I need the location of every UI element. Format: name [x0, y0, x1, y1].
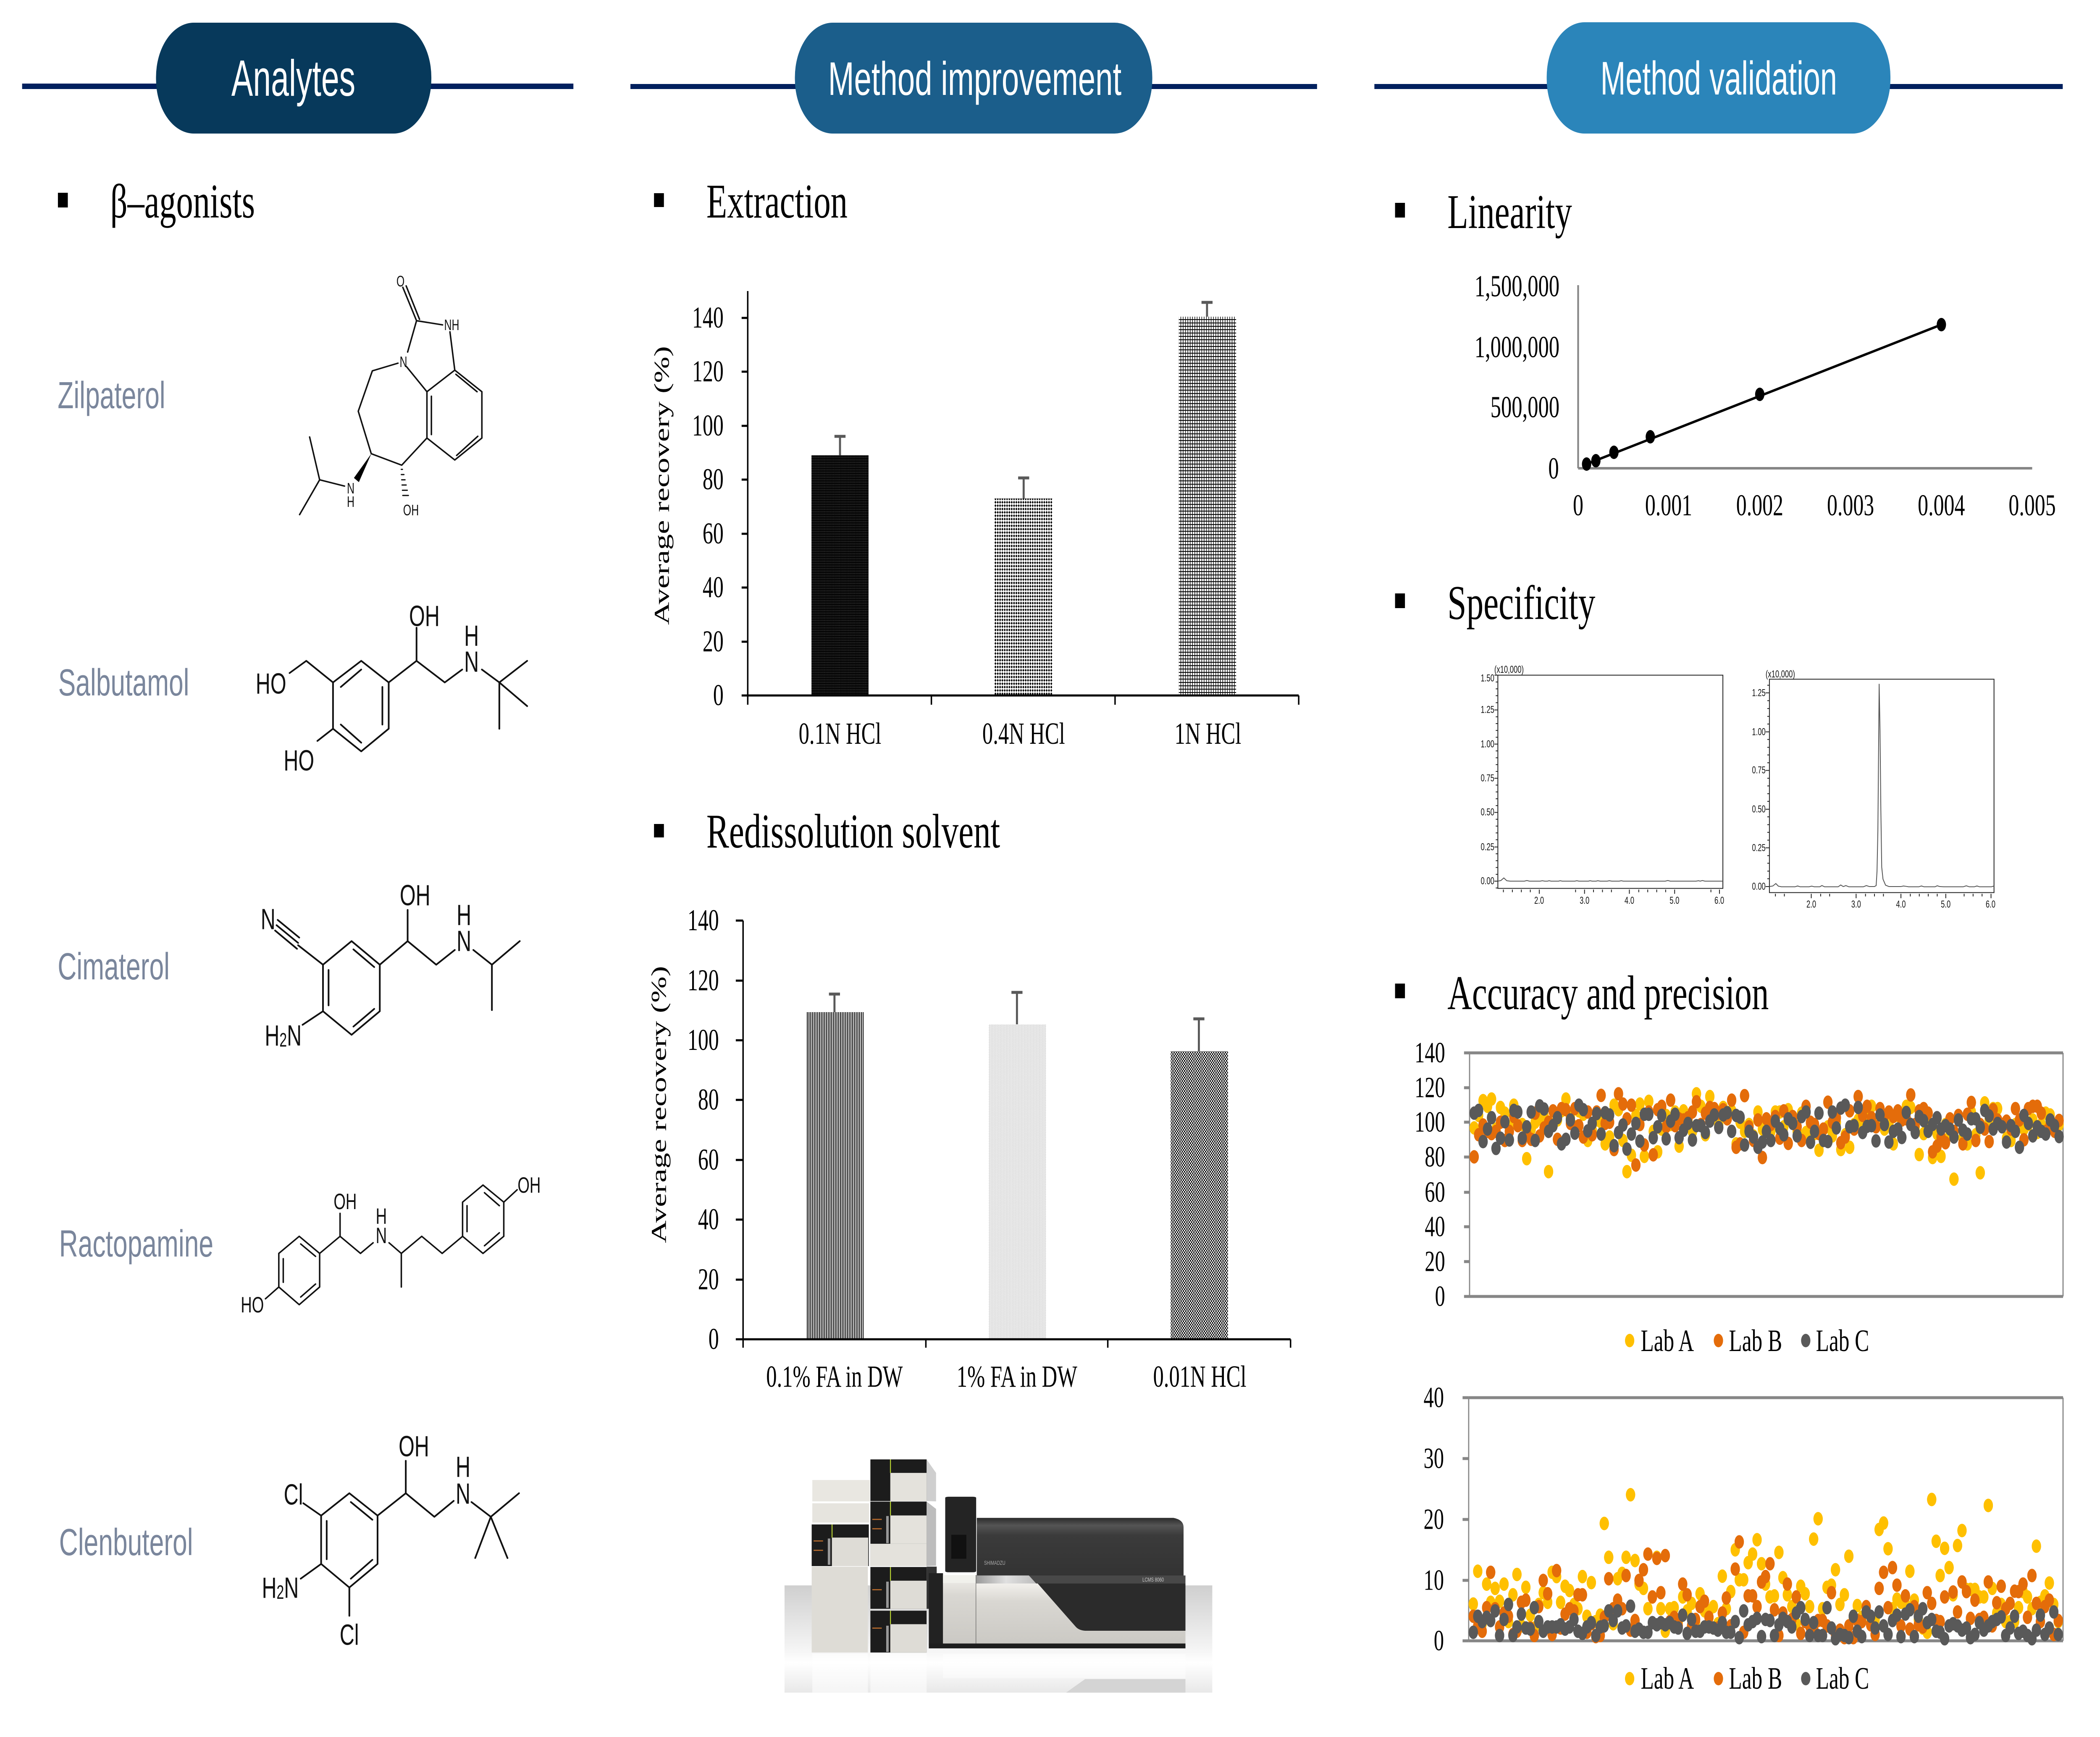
label: Salbutamol: Salbutamol	[58, 662, 189, 704]
panel: method improvement header: Method improvement	[828, 53, 1121, 105]
heading: Linearity	[1395, 185, 1572, 239]
structure: Cimaterol	[261, 878, 520, 1052]
structure: Cimaterol: 2	[279, 1029, 287, 1051]
axis numbers: 0.75	[1752, 765, 1766, 776]
structure: Zilpaterol: NH	[444, 317, 459, 333]
axis numbers: 3.0	[1851, 899, 1861, 910]
heading: Redissolution solvent: Redissolution solvent	[706, 804, 1000, 858]
axis numbers: 5.0	[1941, 899, 1950, 910]
series: Lab C	[1473, 1604, 2058, 1639]
axis numbers: 0.75	[1481, 773, 1494, 784]
y axis numbers: 60	[1425, 1176, 1445, 1209]
heading: Linearity: Linearity	[1447, 185, 1572, 239]
error bars	[829, 992, 1205, 1051]
y axis numbers: 0	[713, 679, 724, 712]
structure: Zilpaterol: N	[347, 480, 354, 497]
y axis numbers: 20	[698, 1263, 719, 1296]
structure: Clenbuterol: OH	[399, 1429, 429, 1463]
structure: Cimaterol: N	[287, 1018, 302, 1052]
y axis numbers: 30	[1423, 1442, 1444, 1475]
axis numbers: (x10,000)	[1766, 669, 1795, 680]
y axis numbers	[1423, 1381, 1444, 1657]
axis numbers: 3.0	[1580, 895, 1589, 906]
structure: Clenbuterol: Cl	[340, 1618, 359, 1651]
legend: Lab C	[1816, 1661, 1869, 1695]
calibration line	[1587, 325, 1941, 464]
structure: Salbutamol: N	[464, 645, 479, 678]
structure: Cimaterol: H	[457, 898, 471, 931]
label: Zilpaterol: Zilpaterol	[58, 375, 165, 417]
axis numbers: 0.50	[1481, 807, 1494, 818]
axis numbers: 1.00	[1481, 739, 1494, 750]
y axis numbers: 20	[1425, 1245, 1445, 1278]
y axis numbers	[688, 904, 719, 1356]
error bars	[835, 302, 1213, 499]
bar: 0.4N HCl	[995, 499, 1052, 695]
structure: Ractopamine: OH	[333, 1189, 357, 1214]
x axis categories: 1% FA in DW	[957, 1359, 1077, 1393]
y axis numbers: 1,000,000	[1475, 330, 1559, 364]
axes	[736, 921, 1291, 1348]
y axis numbers: 0	[709, 1322, 719, 1356]
structure: Ractopamine: H	[376, 1204, 387, 1229]
panel: analytes header	[22, 23, 573, 134]
structure: Cimaterol: N	[457, 924, 471, 958]
x axis categories: 0.01N HCl	[1153, 1359, 1247, 1393]
x axis categories: 0.4N HCl	[982, 716, 1065, 750]
y axis title: Average recovery (%)	[650, 346, 674, 625]
series: Lab B	[1474, 1094, 2059, 1165]
y axis numbers: 140	[692, 301, 724, 335]
instrument model text: LCMS 8060	[1142, 1576, 1164, 1583]
bar chart: redissolution solvent recovery	[647, 904, 1291, 1393]
axis numbers: 0.25	[1481, 842, 1494, 853]
y axis numbers: 80	[698, 1083, 719, 1117]
axes	[1578, 285, 2032, 468]
y axis numbers	[692, 301, 724, 712]
heading: beta-agonists: β–agonists	[110, 174, 255, 228]
heading: Extraction: Extraction	[706, 174, 848, 228]
x axis categories	[799, 716, 1241, 750]
structure: Clenbuterol: 2	[276, 1582, 284, 1603]
structure: Salbutamol: OH	[409, 599, 440, 632]
axis numbers: 0.25	[1752, 842, 1766, 853]
x axis numbers: 0	[1573, 489, 1583, 522]
axis numbers	[1481, 664, 1724, 906]
y axis numbers: 60	[698, 1143, 719, 1177]
axes	[742, 291, 1299, 705]
y axis title: Average recovery (%)	[647, 966, 671, 1243]
x axis categories: 0.1N HCl	[799, 716, 881, 750]
structure: Clenbuterol: H	[456, 1450, 470, 1483]
scatter chart: accuracy	[1415, 1036, 2063, 1358]
structure: Ractopamine: HO	[241, 1292, 264, 1317]
axis numbers: 1.00	[1752, 727, 1766, 737]
y axis numbers: 20	[703, 625, 724, 659]
y axis numbers: 140	[1415, 1036, 1445, 1069]
y axis numbers: 80	[703, 463, 724, 496]
x axis numbers: 0.004	[1918, 489, 1965, 522]
y axis numbers: 100	[688, 1023, 719, 1057]
axis numbers: 0.00	[1481, 876, 1494, 887]
legend	[1625, 1661, 1869, 1695]
x axis categories: 0.1% FA in DW	[766, 1359, 903, 1393]
axis numbers: 1.25	[1752, 687, 1766, 698]
illustration: LC-MS/MS instrument	[785, 1459, 1212, 1692]
axis numbers: 4.0	[1625, 895, 1634, 906]
structure: Cimaterol: N	[261, 902, 276, 936]
x axis numbers	[1573, 489, 2056, 522]
bar: 1N HCl	[1179, 317, 1236, 695]
y axis numbers: 0	[1435, 1280, 1445, 1313]
x axis categories	[766, 1359, 1247, 1393]
axis numbers: 0.00	[1752, 881, 1766, 892]
bar chart: extraction recovery	[650, 291, 1299, 750]
panel: method improvement header	[630, 23, 1317, 134]
y axis numbers: 1,500,000	[1475, 269, 1559, 303]
label: Clenbuterol: Clenbuterol	[59, 1522, 193, 1564]
legend: Lab B	[1729, 1323, 1782, 1358]
legend: Lab C	[1816, 1323, 1869, 1358]
structure: Cimaterol: OH	[400, 878, 430, 912]
y axis numbers	[1475, 269, 1559, 485]
axis numbers: 0.50	[1752, 804, 1766, 815]
chromatogram: sample peak	[1752, 669, 1995, 910]
chromatogram: blank	[1481, 664, 1724, 906]
structure: Salbutamol: HO	[284, 743, 314, 777]
axis numbers: 2.0	[1534, 895, 1544, 906]
structure: Clenbuterol: N	[284, 1571, 299, 1604]
y axis numbers: 40	[698, 1203, 719, 1236]
axis numbers: 5.0	[1670, 895, 1679, 906]
instrument brand text: SHIMADZU	[984, 1559, 1005, 1566]
legend: Lab B	[1729, 1661, 1782, 1695]
bar: 0.1% FA in DW	[806, 1012, 864, 1339]
x axis categories: 1N HCl	[1175, 716, 1241, 750]
y axis numbers: 0	[1434, 1624, 1444, 1657]
axis numbers: 2.0	[1806, 899, 1816, 910]
y axis numbers: 20	[1423, 1503, 1444, 1536]
legend: Lab A	[1641, 1661, 1694, 1695]
structure: Ractopamine: N	[376, 1223, 387, 1248]
y axis numbers: 40	[1425, 1210, 1445, 1243]
line chart: linearity	[1475, 269, 2056, 522]
panel: method validation header: Method validation	[1600, 52, 1837, 105]
label: Ractopamine: Ractopamine	[59, 1223, 213, 1265]
x axis numbers: 0.001	[1645, 489, 1692, 522]
axis numbers: 1.50	[1481, 673, 1494, 684]
y axis numbers: 140	[688, 904, 719, 937]
label: Cimaterol: Cimaterol	[58, 946, 170, 988]
structure: Salbutamol: H	[464, 619, 479, 652]
panel: method validation header	[1374, 22, 2063, 134]
structure: Zilpaterol: OH	[403, 502, 419, 519]
axis numbers: 6.0	[1714, 895, 1724, 906]
y axis numbers: 40	[703, 571, 724, 604]
structure: Ractopamine	[241, 1173, 541, 1317]
y axis numbers: 120	[688, 964, 719, 997]
heading: Specificity: Specificity	[1447, 576, 1595, 630]
structure: Clenbuterol: Cl	[284, 1477, 303, 1511]
plot frame	[1464, 1053, 2063, 1296]
axis numbers	[1752, 669, 1995, 910]
legend	[1625, 1323, 1869, 1358]
y axis numbers: 500,000	[1491, 390, 1559, 424]
structure: Zilpaterol: H	[347, 493, 354, 510]
y axis numbers: 10	[1423, 1564, 1444, 1597]
y axis numbers: 120	[1415, 1071, 1445, 1104]
panel: analytes header: Analytes	[231, 50, 355, 107]
data points	[1582, 318, 1946, 471]
structure: Clenbuterol: H	[262, 1571, 276, 1604]
axis numbers: 6.0	[1986, 899, 1995, 910]
y axis numbers: 60	[703, 517, 724, 551]
structure: Cimaterol: H	[265, 1018, 279, 1052]
bar: 0.1N HCl	[811, 455, 869, 695]
x axis numbers: 0.003	[1827, 489, 1874, 522]
bar: 1% FA in DW	[989, 1024, 1046, 1339]
series: Lab B	[1473, 1542, 2058, 1637]
y axis numbers	[1415, 1036, 1445, 1313]
heading: Accuracy and precision: Accuracy and precision	[1447, 966, 1769, 1020]
structure: Clenbuterol	[262, 1429, 519, 1651]
structure: Zilpaterol: O	[396, 273, 404, 290]
axis numbers: (x10,000)	[1494, 664, 1524, 675]
y axis numbers: 100	[692, 409, 724, 443]
y axis numbers: 40	[1423, 1381, 1444, 1414]
y axis numbers: 100	[1415, 1106, 1445, 1139]
y axis numbers: 120	[692, 355, 724, 388]
series: Lab A	[1474, 1094, 2059, 1179]
structure: Zilpaterol	[299, 273, 482, 519]
axis numbers: 1.25	[1481, 704, 1494, 715]
series: Lab A	[1473, 1495, 2058, 1632]
x axis numbers: 0.005	[2008, 489, 2056, 522]
structure: Zilpaterol: N	[399, 354, 407, 370]
structure: Ractopamine: OH	[517, 1173, 541, 1198]
structure: Salbutamol: HO	[256, 666, 286, 700]
scatter chart: precision	[1423, 1381, 2063, 1695]
plot frame	[1462, 1398, 2063, 1641]
series: Lab C	[1474, 1105, 2059, 1149]
structure: Clenbuterol: N	[456, 1477, 470, 1510]
x axis numbers: 0.002	[1736, 489, 1783, 522]
y axis numbers: 80	[1425, 1141, 1445, 1173]
structure: Salbutamol	[256, 599, 527, 777]
axis numbers: 4.0	[1896, 899, 1906, 910]
y axis numbers: 0	[1548, 451, 1559, 485]
legend: Lab A	[1641, 1323, 1694, 1358]
bar: 0.01N HCl	[1171, 1051, 1228, 1339]
